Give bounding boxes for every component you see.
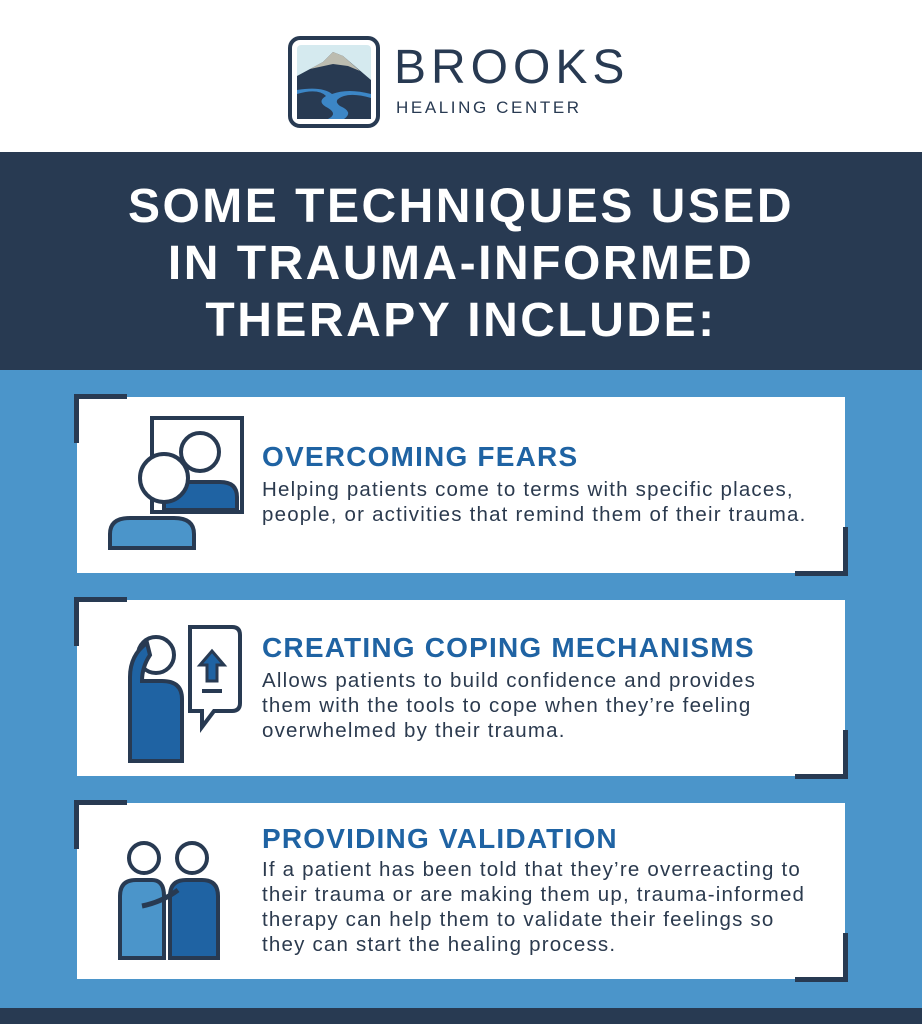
text: they can start the healing process. [262,933,616,956]
logo: HEALING CENTER [396,98,582,117]
icon: thinking person [128,625,242,763]
brand name: BROOKS [394,41,629,94]
text: people, or activities that remind them of their trauma. [262,503,807,526]
text [262,669,756,742]
icon: two people [118,841,220,960]
panel: overcoming fears [77,397,845,573]
text: their trauma or are making them up, trauma-informed [262,883,805,906]
heading: CREATING COPING MECHANISMS [262,632,755,663]
title: THERAPY INCLUDE: [205,294,717,347]
panel: providing validation [77,803,845,979]
text: Helping patients come to terms with specific places, [262,478,794,501]
text: If a patient has been told that they’re overreacting to [262,858,801,881]
text [262,858,805,956]
text: overwhelmed by their trauma. [262,719,566,742]
text: therapy can help them to validate their feelings so [262,908,774,931]
title: SOME TECHNIQUES USED [128,180,794,233]
title [128,180,794,347]
heading: OVERCOMING FEARS [262,441,578,472]
logo [288,36,629,128]
text: them with the tools to cope when they’re feeling [262,694,752,717]
text [262,478,807,526]
heading: PROVIDING VALIDATION [262,823,618,854]
title: IN TRAUMA-INFORMED [168,237,754,290]
text: Allows patients to build confidence and provides [262,669,756,692]
icon: mountain [288,36,380,128]
panel: coping mechanisms [77,600,845,776]
icon: mirror [108,416,244,550]
